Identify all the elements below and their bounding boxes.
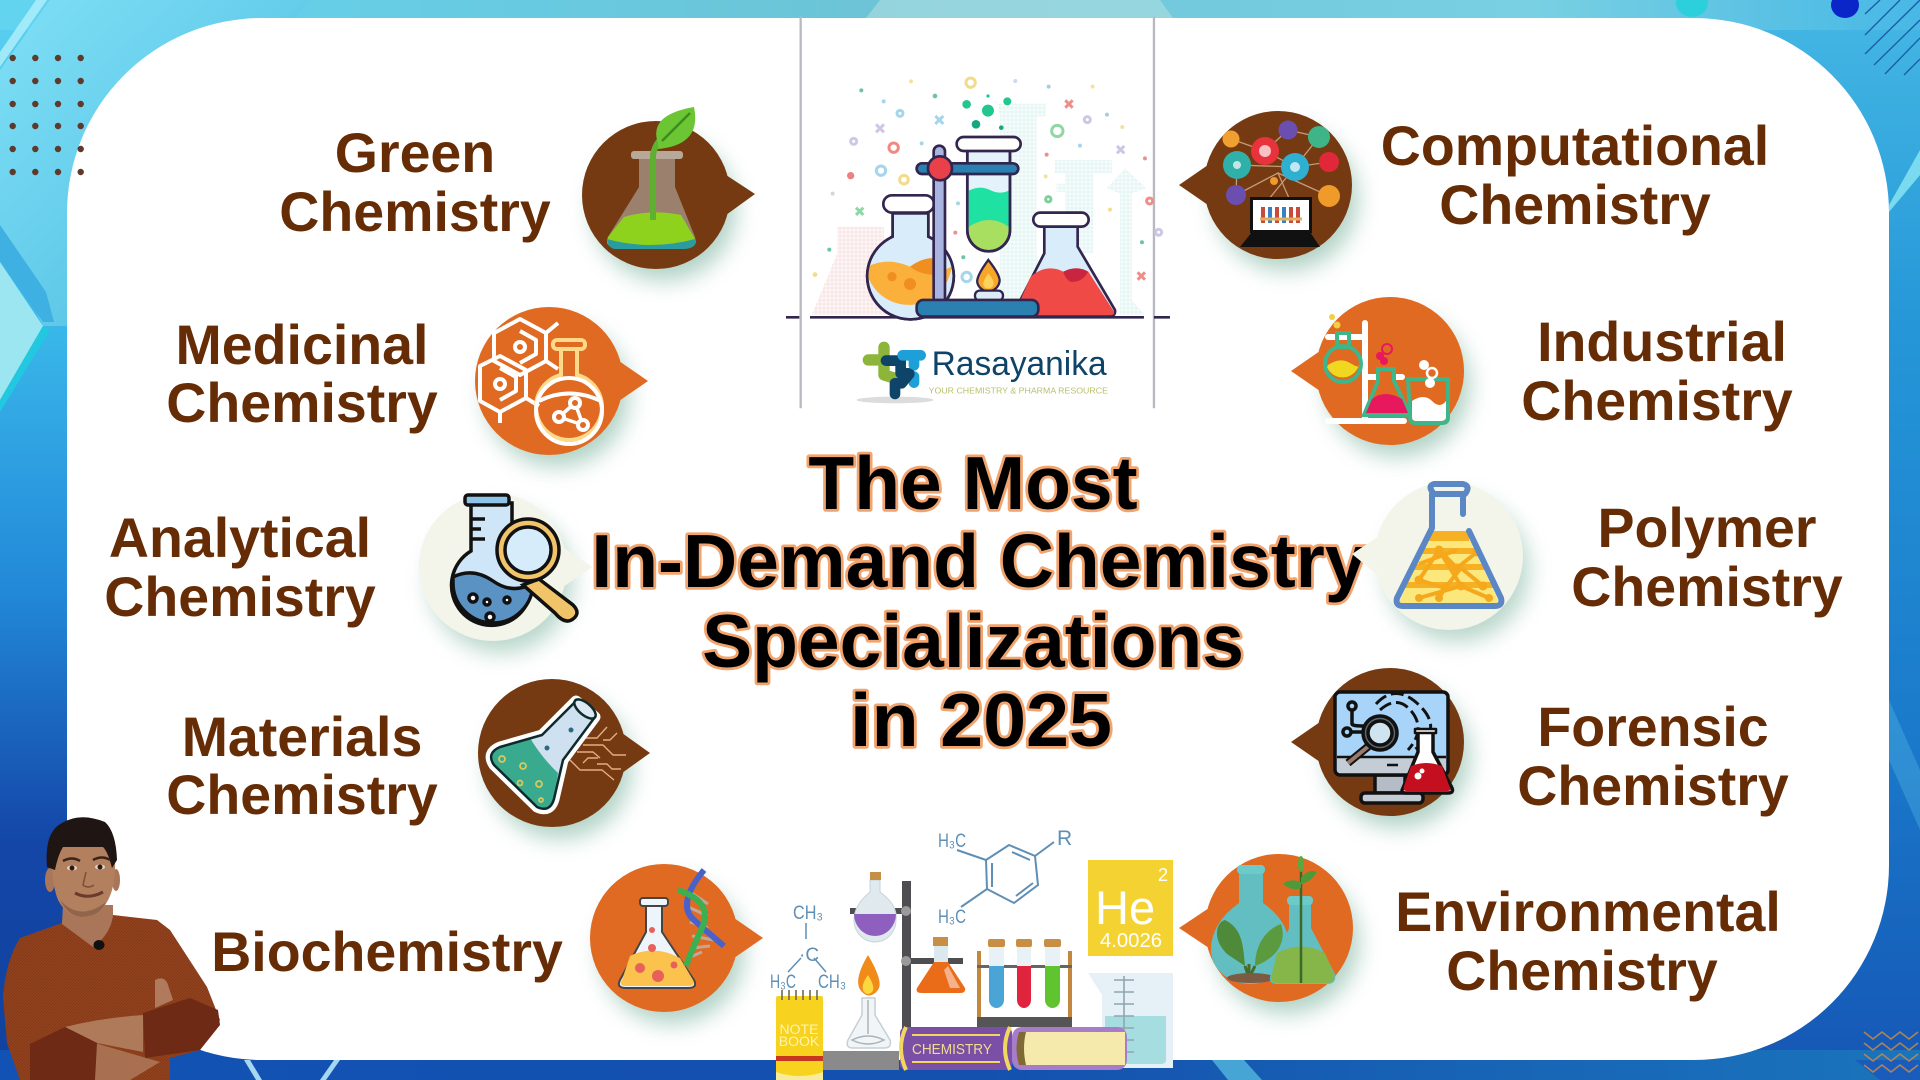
beaker <box>1088 973 1173 1068</box>
icon: industrial chemistry bubble <box>1291 297 1470 457</box>
molecule: ring: H₃C <box>938 907 966 928</box>
sweater body <box>3 915 220 1080</box>
test tube <box>957 137 1021 251</box>
network and laptop <box>1222 120 1340 247</box>
molecule: ring <box>938 827 1072 928</box>
title: Specializations <box>702 599 1244 683</box>
icon: analytical chemistry bubble <box>419 493 592 653</box>
icon: materials chemistry bubble <box>478 679 650 839</box>
icon: forensic chemistry bubble <box>1291 668 1470 828</box>
round flask <box>867 195 954 319</box>
chemistry books <box>900 1027 1127 1070</box>
bottom lab illustration <box>770 827 1173 1080</box>
title: in 2025 <box>850 678 1112 762</box>
conical flask <box>1014 213 1115 316</box>
crossed arms <box>30 978 220 1080</box>
flask with leaf <box>607 107 696 249</box>
molecule: branched carbon <box>770 903 846 993</box>
table <box>823 1051 899 1070</box>
molecule: ring: H₃C <box>938 831 966 852</box>
monitor magnifier flask <box>1335 692 1452 803</box>
molecule: branched carbon: CH₃ <box>793 903 823 924</box>
presenter portrait <box>3 817 220 1080</box>
label: Green Chemistry: Green <box>335 122 495 184</box>
decorative stripes top right <box>1865 0 1920 75</box>
element tile: helium: 2 <box>1158 865 1168 885</box>
molecule: branched carbon: ·C <box>799 945 819 966</box>
notebook: NOTE <box>780 1021 818 1037</box>
lapel microphone <box>94 940 104 950</box>
bubbles <box>962 94 1011 130</box>
label: Industrial Chemistry: Chemistry <box>1521 370 1793 432</box>
confetti dots <box>813 78 1162 282</box>
divider lines <box>801 17 1154 408</box>
element tile: helium: 4.0026 <box>1100 930 1162 952</box>
notebook: BOOK <box>779 1033 820 1049</box>
logo <box>857 345 1108 403</box>
glass flasks with plants <box>1211 856 1335 984</box>
decorative chevrons bottom right <box>1864 1032 1918 1072</box>
title <box>591 441 1367 762</box>
icon: biochemistry bubble <box>590 864 763 1024</box>
flask with polymer network <box>1397 484 1501 606</box>
molecule: branched carbon: CH₃ <box>818 972 846 993</box>
label: Green Chemistry: Chemistry <box>279 181 551 243</box>
icon: medicinal chemistry bubble <box>475 307 648 467</box>
label: Analytical Chemistry: Analytical <box>109 507 371 569</box>
label: Biochemistry: Biochemistry <box>211 921 563 983</box>
label: Materials Chemistry: Materials <box>182 706 422 768</box>
stand <box>917 146 1038 317</box>
icon: green chemistry bubble <box>582 107 755 281</box>
label: Forensic Chemistry: Forensic <box>1537 696 1769 758</box>
flask and dna <box>619 870 724 988</box>
label: Medicinal Chemistry: Chemistry <box>166 372 438 434</box>
tilted flask and circuit <box>491 696 626 809</box>
element tile: helium <box>1088 860 1173 956</box>
lab stand and glassware <box>1325 314 1448 423</box>
icon: polymer chemistry bubble <box>1352 482 1529 642</box>
label: Industrial Chemistry: Industrial <box>1537 311 1787 373</box>
logo: YOUR CHEMISTRY & PHARMA RESOURCE <box>929 386 1108 396</box>
neck <box>62 905 113 947</box>
label: Medicinal Chemistry: Medicinal <box>176 314 428 376</box>
top centre lab illustration panel <box>786 17 1170 408</box>
burner flask <box>847 955 890 1048</box>
notebook <box>776 990 823 1080</box>
decorative dot grid <box>10 55 84 175</box>
icon: computational chemistry bubble <box>1179 111 1358 271</box>
label: Computational Chemistry: Chemistry <box>1439 174 1711 236</box>
round flask and magnifier <box>452 495 577 625</box>
baseline <box>786 313 1170 321</box>
burner <box>975 260 1003 301</box>
label: Analytical Chemistry: Chemistry <box>104 566 376 628</box>
head and hair <box>45 817 120 917</box>
molecule: ring: R <box>1057 827 1072 850</box>
chemistry books: CHEMISTRY <box>912 1041 992 1058</box>
title: The Most <box>808 441 1138 525</box>
hexagon molecules and flask <box>480 319 602 444</box>
test tube rack <box>977 939 1072 1027</box>
label: Environmental Chemistry: Environmental <box>1395 881 1781 943</box>
label: Computational Chemistry: Computational <box>1381 115 1769 177</box>
title: In-Demand Chemistry <box>591 519 1367 603</box>
label: Forensic Chemistry: Chemistry <box>1517 755 1789 817</box>
icon: environmental chemistry bubble <box>1179 854 1359 1014</box>
dotted background glassware <box>812 103 1147 315</box>
label: Materials Chemistry: Chemistry <box>166 764 438 826</box>
label: Polymer Chemistry: Chemistry <box>1571 556 1843 618</box>
element tile: helium: He <box>1095 881 1155 934</box>
molecule: branched carbon: H₃C <box>770 972 796 993</box>
logo: Rasayanika <box>932 345 1107 383</box>
label: Environmental Chemistry: Chemistry <box>1446 940 1718 1002</box>
ring stand with flasks <box>850 872 965 1031</box>
label: Polymer Chemistry: Polymer <box>1597 497 1817 559</box>
